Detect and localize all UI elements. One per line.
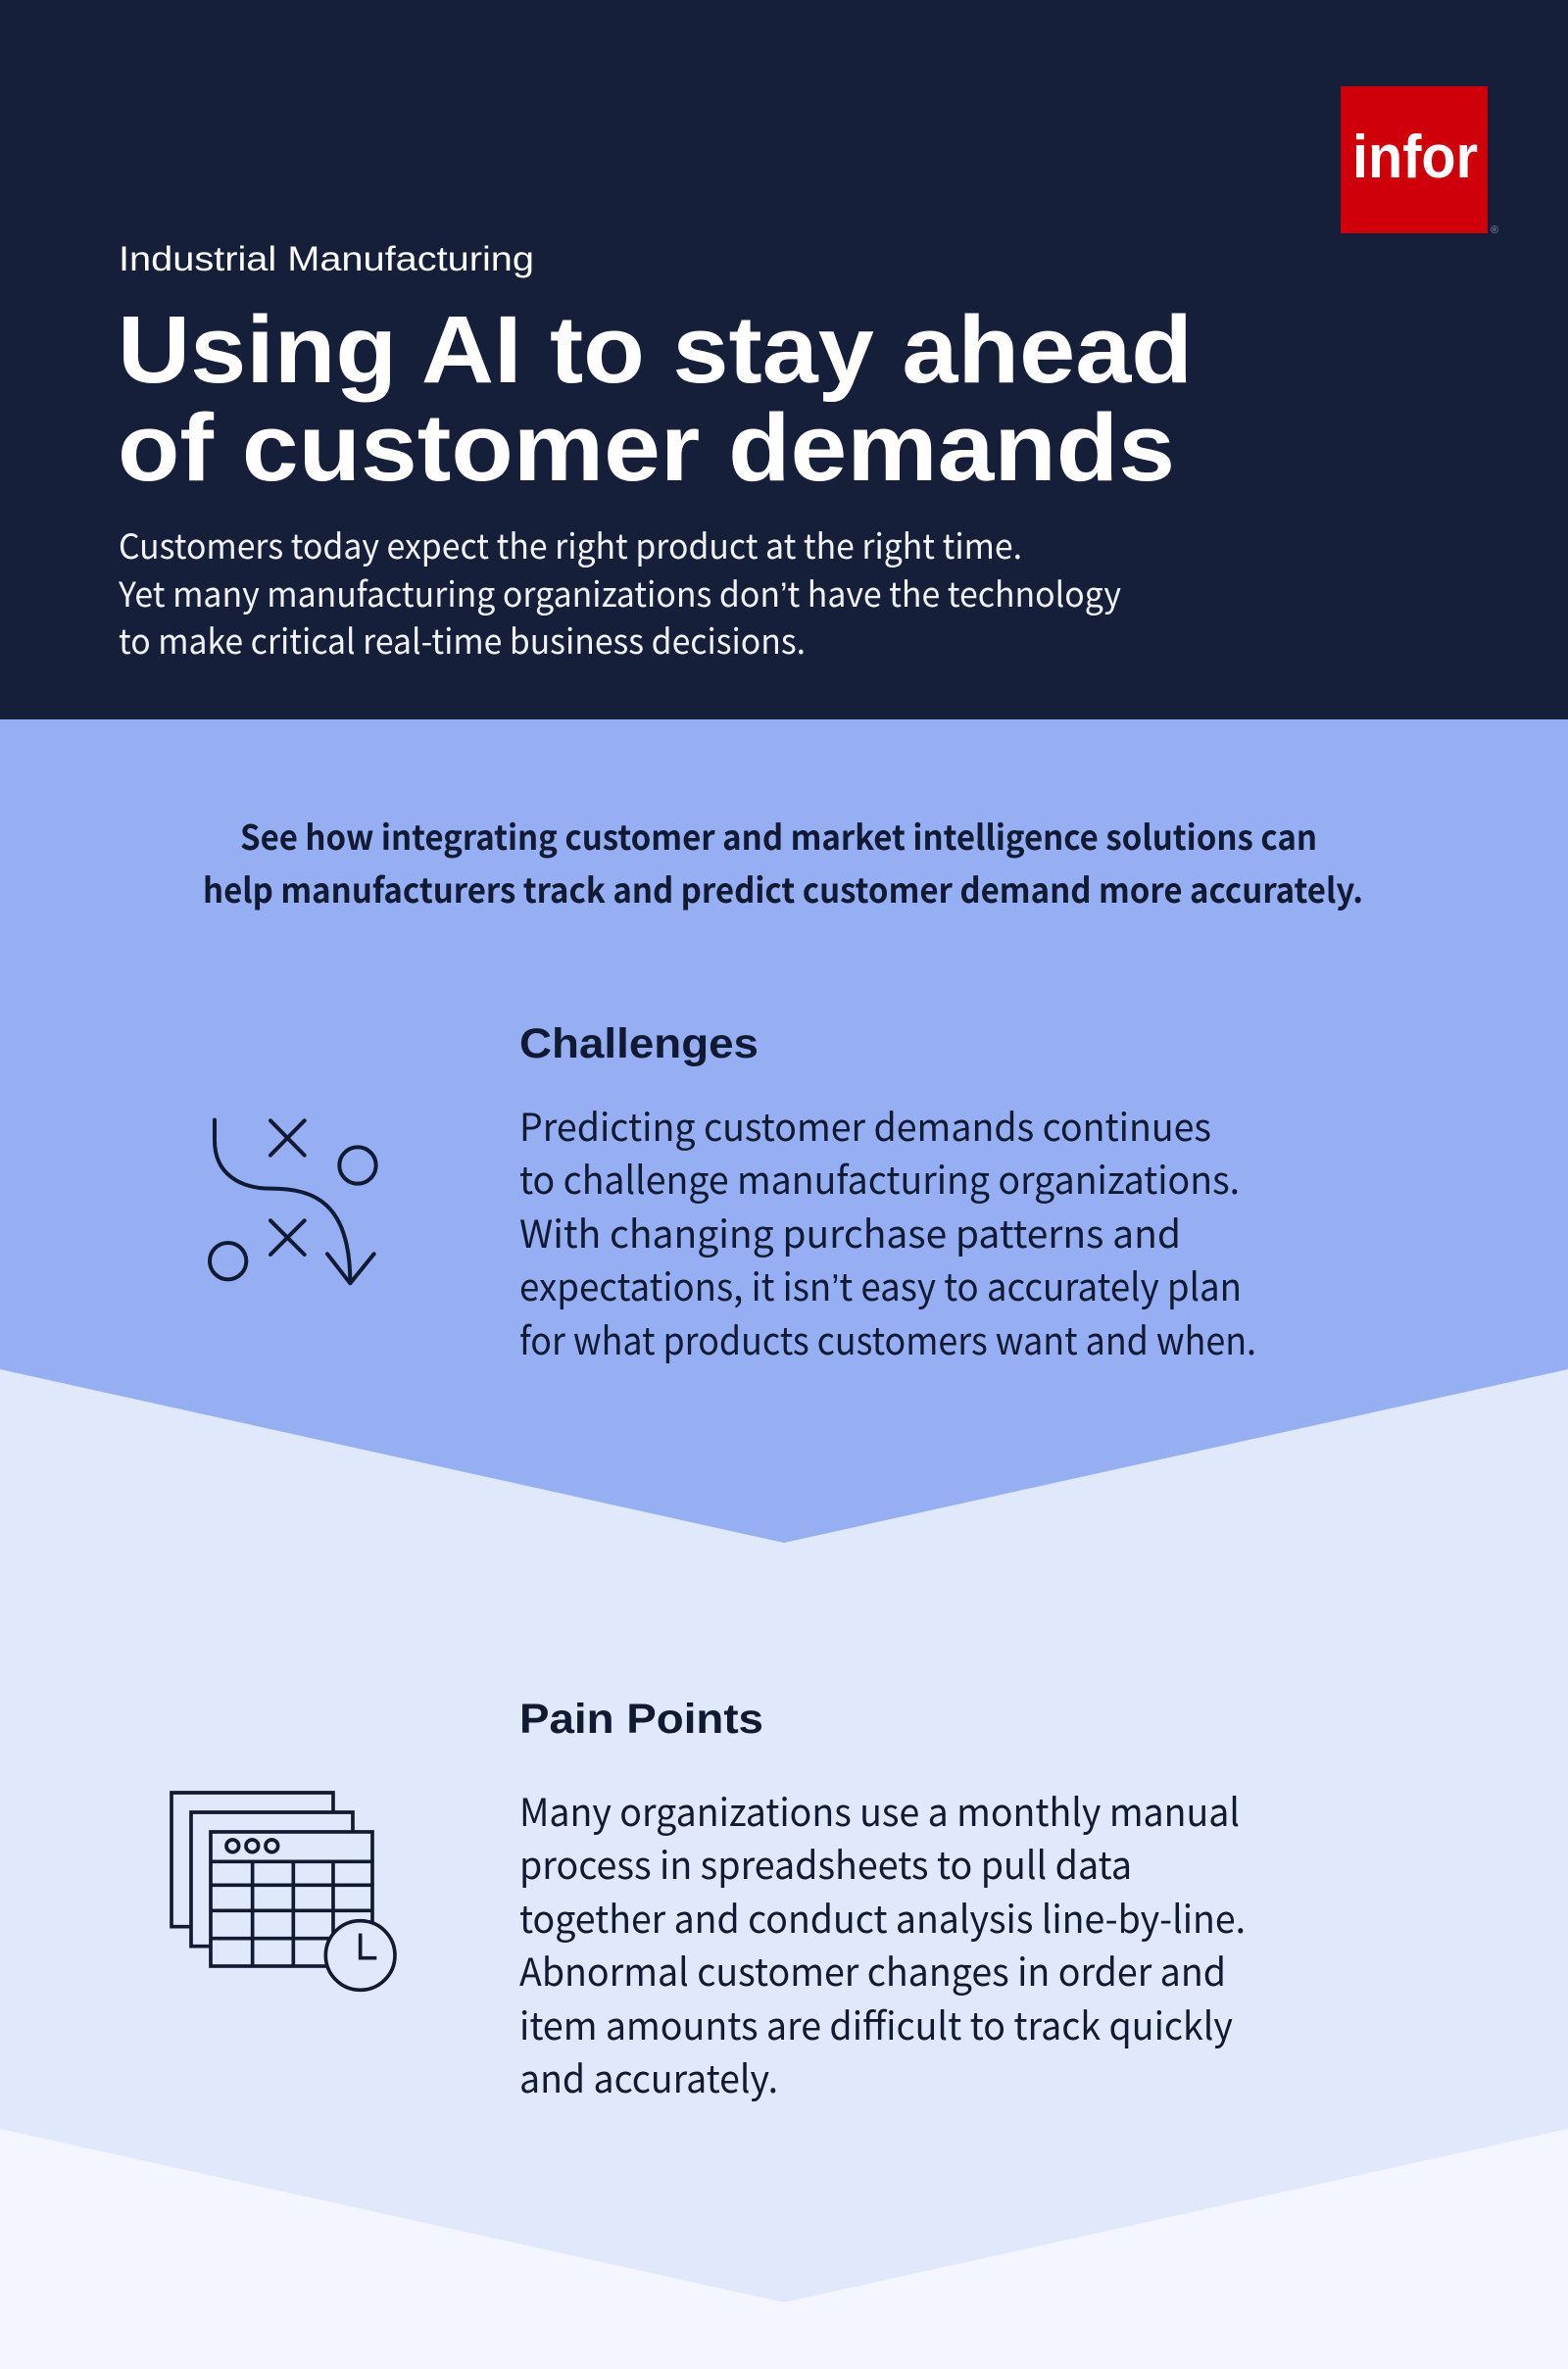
text: pain points body [519,1783,1246,2104]
icon: play diagram with arrow [210,1120,376,1283]
section: pain points [172,1696,1246,2104]
logo: infor: ® [1491,224,1498,236]
callout: lead statement [203,811,1363,913]
title [118,296,1193,501]
text: challenges body: to challenge manufacturing organizations. [519,1151,1240,1206]
callout: lead statement: help manufacturers track and predict customer demand more accurately. [203,864,1363,913]
title: Using AI to stay ahead [118,296,1193,403]
text: pain points body: and accurately. [519,2049,778,2104]
logo: infor: infor [1352,123,1478,191]
intro text: Customers today expect the right product at the right time. [119,519,1022,569]
panel: pain points chevron [0,1369,1568,2302]
heading: challenges: Challenges [519,1020,759,1067]
text: challenges body [519,1098,1256,1366]
icon: stacked spreadsheets with clock [172,1793,395,1990]
title: of customer demands [118,394,1175,501]
intro text: Yet many manufacturing organizations don’t have the technology [118,568,1121,617]
eyebrow: industry label: Industrial Manufacturing [119,240,534,278]
text: pain points body: together and conduct analysis line-by-line. [519,1890,1246,1945]
text: pain points body: process in spreadsheets to pull data [519,1836,1132,1891]
text: pain points body: Many organizations use a monthly manual [519,1783,1240,1838]
intro text: to make critical real-time business decisions. [119,615,806,665]
heading: pain points: Pain Points [519,1696,763,1743]
text: challenges body: Predicting customer demands continues [519,1098,1211,1153]
panel: challenges chevron [0,719,1568,1543]
text: pain points body: item amounts are difficult to track quickly [519,1997,1233,2051]
text: pain points body: Abnormal customer changes in order and [519,1943,1226,1998]
panel: header [0,0,1568,719]
intro text [118,519,1121,665]
text: challenges body: expectations, it isn’t easy to accurately plan [519,1258,1242,1312]
logo: infor [1341,86,1498,236]
text: challenges body: for what products customers want and when. [519,1311,1256,1366]
text: challenges body: With changing purchase patterns and [519,1205,1181,1259]
section: challenges [210,1020,1256,1366]
callout: lead statement: See how integrating customer and market intelligence solutions can [240,811,1317,861]
